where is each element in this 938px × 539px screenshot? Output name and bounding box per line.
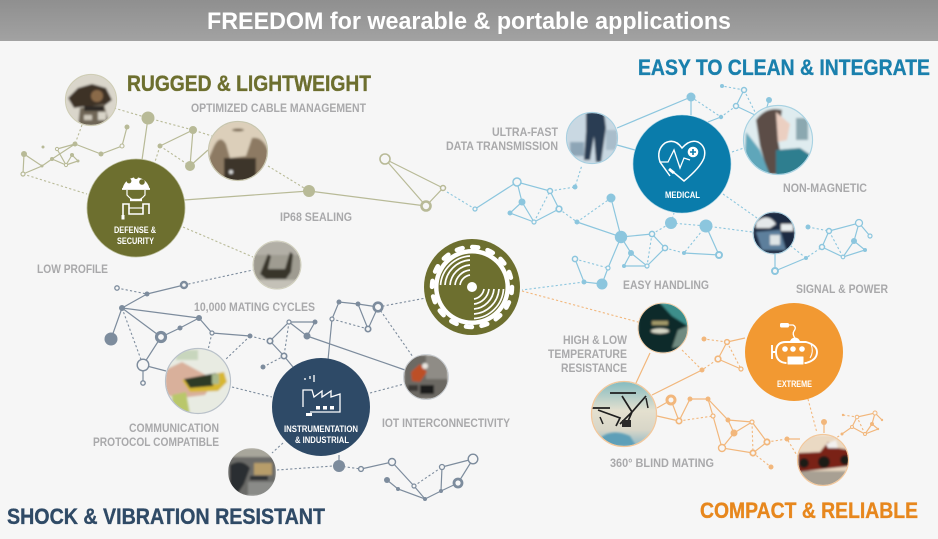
title bar: FREEDOM for wearable & portable applications [207, 8, 731, 35]
label: communication protocol compatible: COMMUNICATION [129, 423, 219, 435]
olive node network [21, 108, 446, 257]
central gear logo [424, 239, 520, 335]
category circle: extreme [745, 303, 843, 401]
orange node network [522, 291, 883, 470]
photo ring: race car [798, 434, 848, 486]
photo ring: exoskeleton [566, 112, 618, 164]
panel: compact and reliable / extreme [522, 291, 918, 523]
category circle: extreme: EXTREME [777, 379, 812, 390]
label: 360 degree blind mating: 360° BLIND MATING [610, 458, 714, 470]
photo: underwater vehicle [638, 303, 688, 353]
photo: rugged equipment [253, 241, 301, 290]
photo: connector in hand [753, 212, 795, 254]
label: IoT interconnectivity: IOT INTERCONNECTIVITY [382, 418, 510, 430]
icon: helmet and cable [122, 175, 150, 220]
photo: robotic production line [228, 448, 276, 496]
photo: workers at site [404, 355, 448, 399]
label: high and low temperature resistance [548, 335, 627, 375]
photo ring: vehicles [208, 122, 268, 180]
photo ring: underwater vehicle [638, 303, 688, 353]
category circle: medical [633, 115, 731, 213]
label: high and low temperature resistance: RESISTANCE [561, 363, 627, 375]
panel: easy to clean / medical [446, 55, 930, 296]
photo: drone [592, 382, 656, 446]
icon: submersible with cable [772, 323, 817, 365]
panel: rugged and lightweight / defense and security [21, 71, 446, 290]
slate node network [104, 270, 478, 501]
blue node network [447, 84, 872, 290]
title bar [0, 0, 938, 41]
icon: factory with cable [303, 375, 340, 414]
category circle: instrumentation and industrial: INSTRUMENTATION [284, 424, 358, 435]
heading: rugged and lightweight: RUGGED & LIGHTWEIGHT [127, 71, 371, 96]
category circle: medical: MEDICAL [665, 190, 700, 201]
label: ultra-fast data transmission: DATA TRANSMISSION [446, 141, 558, 153]
heading: shock and vibration resistant: SHOCK & VIBRATION RESISTANT [7, 504, 325, 529]
category circle: defense and security: SECURITY [117, 236, 155, 247]
photo: EEG patient [744, 106, 812, 176]
category circle: defense and security: DEFENSE & [114, 225, 156, 236]
label: communication protocol compatible: PROTOCOL COMPATIBLE [93, 437, 219, 449]
photo: soldier [65, 74, 117, 126]
label: ultra-fast data transmission: ULTRA-FAST [492, 127, 558, 139]
label: IP68 sealing: IP68 SEALING [280, 212, 352, 224]
category circle: instrumentation and industrial [272, 358, 370, 456]
photo: exoskeleton [566, 112, 618, 164]
label: 10,000 mating cycles: 10,000 MATING CYCLES [194, 302, 315, 314]
label: high and low temperature resistance: HIGH & LOW [563, 335, 627, 347]
photo: vehicles [208, 121, 268, 182]
label: high and low temperature resistance: TEMPERATURE [548, 349, 627, 361]
photo ring: connector in hand [753, 212, 795, 254]
icon: heart with pulse and plus [659, 141, 705, 181]
photo ring: rugged equipment [253, 241, 301, 289]
label: easy handling: EASY HANDLING [623, 280, 709, 292]
photo ring: workers at site [404, 354, 448, 400]
photo ring: handheld device [166, 348, 230, 414]
category circle: instrumentation and industrial: & INDUSTRIAL [295, 435, 349, 446]
label: low profile: LOW PROFILE [37, 264, 108, 276]
photo: race car [797, 435, 850, 487]
photo ring: soldier [66, 74, 116, 126]
label: communication protocol compatible [93, 423, 219, 449]
label: optimized cable management: OPTIMIZED CABLE MANAGEMENT [191, 103, 366, 115]
label: signal and power: SIGNAL & POWER [796, 284, 889, 296]
label: ultra-fast data transmission [446, 127, 558, 153]
photo ring: EEG patient [744, 106, 812, 174]
photo ring: drone [592, 382, 656, 446]
panel: shock and vibration / instrumentation [7, 270, 510, 529]
photo: handheld device [165, 348, 231, 414]
category circle: defense and security [87, 159, 185, 257]
label: non-magnetic: NON-MAGNETIC [783, 183, 867, 195]
